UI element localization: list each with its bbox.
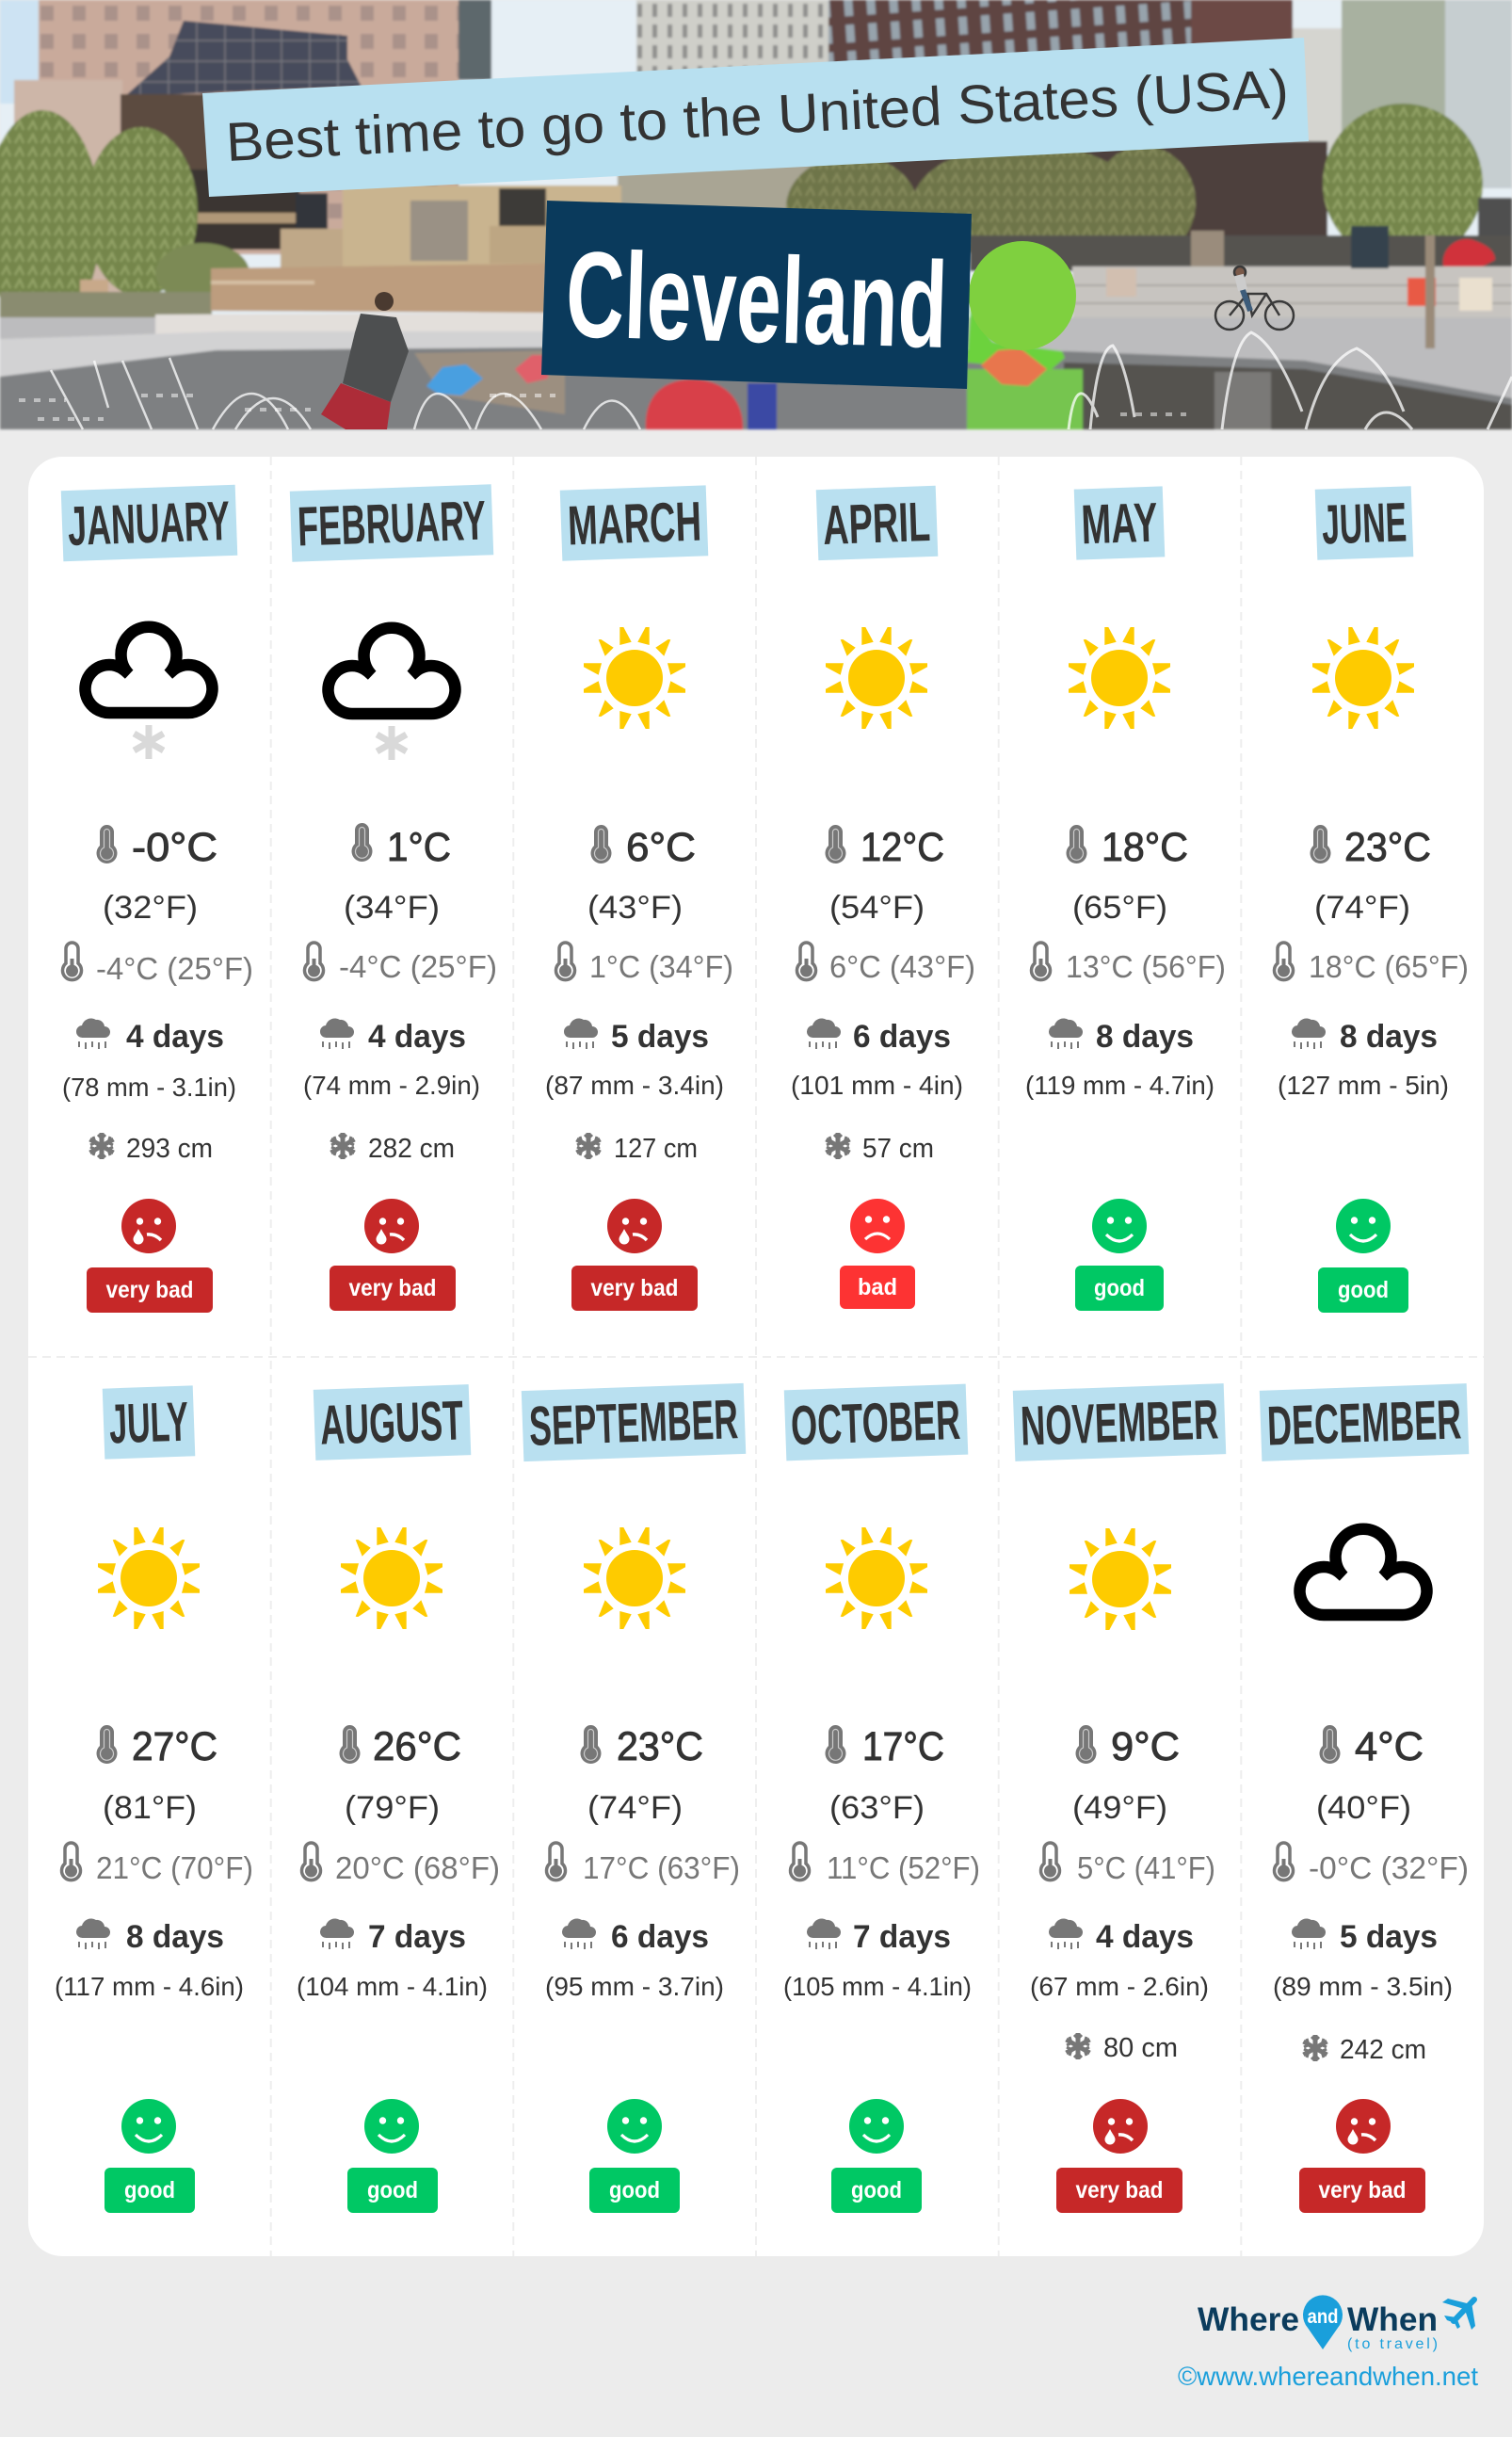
rating face [850, 1199, 905, 1253]
icon: sun [584, 1527, 685, 1629]
logo: Where and When: Where [1198, 2301, 1299, 2338]
rainy days: 8 days [126, 1919, 224, 1955]
rainfall: (78 mm - 3.1in) [62, 1073, 236, 1102]
icon: cloud with snow [85, 627, 213, 759]
rainfall: (89 mm - 3.5in) [1273, 1972, 1453, 2001]
rainy days [320, 1018, 466, 1055]
icon: sun [826, 627, 927, 729]
rating badge: very bad [1075, 2177, 1164, 2203]
snowfall [576, 1133, 698, 1164]
logo: Where and When: When [1347, 2301, 1438, 2338]
temperature in Fahrenheit: (40°F) [1316, 1790, 1411, 1826]
low temperature [1275, 1843, 1469, 1885]
rating face [121, 1199, 176, 1253]
rainy days: 6 days [611, 1919, 709, 1955]
average temperature: 23°C [617, 1724, 703, 1769]
average temperature [1320, 1724, 1424, 1769]
month heading: MARCH [567, 491, 702, 557]
low temperature: 6°C (43°F) [829, 949, 975, 984]
rating badge [1318, 1267, 1408, 1313]
snowfall [827, 1133, 934, 1164]
low temperature [301, 1843, 500, 1885]
icon: sun [98, 1527, 200, 1629]
month heading: OCTOBER [790, 1389, 961, 1457]
rainfall: (67 mm - 2.6in) [1030, 1972, 1209, 2001]
rating badge [831, 2168, 922, 2213]
low temperature: 1°C (34°F) [589, 949, 733, 984]
rating face [849, 2099, 904, 2154]
month heading: JULY [108, 1391, 189, 1455]
rating face [607, 2099, 662, 2154]
low temperature [1275, 943, 1469, 984]
temperature in Fahrenheit: (32°F) [103, 890, 198, 926]
rating badge: very bad [348, 1275, 437, 1301]
rating face [1092, 1199, 1147, 1253]
average temperature: 4°C [1355, 1724, 1424, 1769]
snowfall: 293 cm [126, 1134, 213, 1164]
average temperature [1066, 825, 1188, 870]
rainfall: (105 mm - 4.1in) [783, 1972, 972, 2001]
rating badge: good [851, 2177, 902, 2203]
average temperature: 26°C [373, 1724, 461, 1769]
rating badge [105, 2168, 195, 2213]
average temperature [825, 825, 944, 870]
rainy days [564, 1018, 709, 1055]
rating badge [1299, 2168, 1425, 2213]
rating face [1336, 2099, 1391, 2154]
month heading: SEPTEMBER [528, 1388, 739, 1458]
panel: February [290, 484, 497, 1311]
rainy days [1292, 1918, 1438, 1955]
rating face [364, 1199, 419, 1253]
average temperature: -0°C [132, 825, 217, 870]
icon: map pin: and [1307, 2306, 1339, 2328]
month heading [522, 1383, 746, 1461]
average temperature: 6°C [626, 825, 696, 870]
low temperature: 17°C (63°F) [583, 1850, 740, 1885]
rainy days [807, 1918, 951, 1955]
rating badge [1075, 1266, 1164, 1311]
panel: April [791, 486, 975, 1309]
temperature in Fahrenheit: (74°F) [587, 1790, 683, 1826]
rainfall: (74 mm - 2.9in) [303, 1071, 480, 1100]
icon: sun [584, 627, 685, 729]
low temperature [305, 943, 497, 984]
average temperature [352, 823, 451, 870]
rainy days: 8 days [1340, 1019, 1438, 1055]
snowfall: 242 cm [1340, 2035, 1426, 2065]
title text: Best time to go to the United States (USA) [224, 58, 1290, 173]
low temperature [791, 1843, 980, 1885]
website credit: ©www.whereandwhen.net [1178, 2362, 1478, 2391]
icon: airplane [1442, 2299, 1475, 2330]
average temperature [96, 1724, 217, 1769]
rainy days [1049, 1018, 1194, 1055]
low temperature: 20°C (68°F) [335, 1850, 500, 1885]
average temperature [580, 1724, 703, 1769]
rainfall: (104 mm - 4.1in) [297, 1972, 488, 2001]
snowfall: 127 cm [614, 1134, 698, 1164]
snowfall: 282 cm [368, 1134, 455, 1164]
low temperature: 5°C (41°F) [1077, 1850, 1215, 1885]
low temperature: -0°C (32°F) [1309, 1850, 1469, 1885]
rating face [1093, 2099, 1148, 2154]
icon: sun [1069, 627, 1170, 729]
temperature in Fahrenheit: (63°F) [829, 1790, 925, 1826]
rainy days [76, 1918, 224, 1955]
month heading: JANUARY [67, 490, 231, 557]
rating badge [87, 1267, 213, 1313]
logo: Where and When [1198, 2295, 1475, 2352]
icon: sun [1312, 627, 1414, 729]
header photo: Cleveland plaza with fountain [0, 0, 1512, 429]
panel: monthly card [28, 457, 1484, 2256]
rainfall: (87 mm - 3.4in) [545, 1071, 724, 1100]
temperature in Fahrenheit: (43°F) [587, 890, 683, 926]
low temperature: -4°C (25°F) [96, 951, 253, 986]
month heading [1315, 486, 1413, 560]
temperature in Fahrenheit: (34°F) [344, 890, 440, 926]
month heading: MAY [1080, 492, 1159, 556]
snowfall [1066, 2033, 1178, 2063]
icon: map pin [1303, 2295, 1343, 2349]
low temperature: 18°C (65°F) [1309, 949, 1469, 984]
rainy days [562, 1918, 709, 1955]
figure: cyclist [1215, 266, 1294, 330]
rainy days: 5 days [611, 1019, 709, 1055]
average temperature [1311, 825, 1431, 870]
temperature in Fahrenheit: (54°F) [829, 890, 925, 926]
rainy days: 4 days [368, 1019, 466, 1055]
rating badge [571, 1266, 698, 1311]
average temperature: 27°C [132, 1724, 217, 1769]
panel: November [1013, 1383, 1226, 2213]
low temperature [555, 943, 733, 984]
rainfall: (119 mm - 4.7in) [1025, 1071, 1214, 1100]
rainy days [320, 1918, 466, 1955]
average temperature: 17°C [862, 1724, 944, 1769]
fountain water jets [19, 332, 1512, 429]
rating face [607, 1199, 662, 1253]
panel: October [783, 1384, 980, 2213]
rainfall: (127 mm - 5in) [1278, 1071, 1449, 1100]
rating badge [589, 2168, 680, 2213]
average temperature [825, 1724, 944, 1769]
icon: sun [826, 1527, 927, 1629]
rating badge: good [367, 2177, 418, 2203]
average temperature [591, 825, 696, 870]
panel: July [55, 1385, 253, 2213]
low temperature: 21°C (70°F) [96, 1850, 253, 1885]
snowfall: 80 cm [1103, 2033, 1178, 2063]
panel: August [297, 1384, 500, 2213]
month heading: NOVEMBER [1020, 1388, 1219, 1458]
rainy days: 7 days [368, 1919, 466, 1955]
rainy days: 6 days [853, 1019, 951, 1055]
city name banner [541, 201, 972, 389]
snowfall: 57 cm [862, 1134, 934, 1164]
low temperature [62, 943, 253, 986]
rating badge: good [1094, 1275, 1145, 1301]
icon: cloud [1299, 1529, 1427, 1615]
snowfall [331, 1133, 455, 1164]
rating face [1336, 1199, 1391, 1253]
month heading [560, 485, 708, 561]
rainfall: (95 mm - 3.7in) [545, 1972, 724, 2001]
panel: December [1260, 1383, 1469, 2213]
month heading [290, 484, 493, 562]
panel: March [545, 485, 733, 1311]
month heading: JUNE [1321, 491, 1407, 557]
rating badge [1056, 2168, 1182, 2213]
month heading: AUGUST [319, 1389, 464, 1457]
temperature in Fahrenheit: (74°F) [1314, 890, 1410, 926]
rainy days: 7 days [853, 1919, 951, 1955]
low temperature [546, 1843, 740, 1885]
rating badge: bad [858, 1274, 897, 1300]
icon: sun [341, 1527, 442, 1629]
rating badge: very bad [1318, 2177, 1407, 2203]
average temperature: 9°C [1111, 1724, 1180, 1769]
title banner [202, 38, 1309, 197]
temperature in Fahrenheit: (81°F) [103, 1790, 197, 1826]
temperature in Fahrenheit: (65°F) [1072, 890, 1167, 926]
snowfall [90, 1133, 213, 1164]
temperature in Fahrenheit: (79°F) [345, 1790, 440, 1826]
month heading [1074, 486, 1165, 560]
green snail sculpture [969, 241, 1076, 350]
icon: cloud with snow [328, 628, 456, 760]
rating badge [840, 1266, 915, 1309]
rainy days [76, 1018, 224, 1055]
average temperature [96, 825, 217, 870]
rating badge [347, 2168, 438, 2213]
rating face [364, 2099, 419, 2154]
low temperature: 11°C (52°F) [827, 1850, 980, 1885]
rainfall: (117 mm - 4.6in) [55, 1972, 244, 2001]
rainy days [1292, 1018, 1438, 1055]
rating badge: good [1338, 1277, 1389, 1303]
rating badge: good [609, 2177, 660, 2203]
rating face [121, 2099, 176, 2154]
low temperature [1032, 943, 1226, 984]
panel: January [61, 485, 253, 1313]
average temperature: 12°C [861, 825, 944, 870]
rainy days: 4 days [126, 1019, 224, 1055]
low temperature: -4°C (25°F) [339, 949, 497, 984]
average temperature: 23°C [1344, 825, 1431, 870]
month heading [61, 485, 237, 561]
average temperature: 1°C [387, 825, 451, 870]
rainy days [1049, 1918, 1194, 1955]
rainy days: 4 days [1096, 1919, 1194, 1955]
month heading [314, 1384, 471, 1461]
month heading: APRIL [822, 491, 931, 557]
low temperature [796, 943, 975, 984]
low temperature: 13°C (56°F) [1066, 949, 1226, 984]
rating badge: very bad [105, 1277, 194, 1303]
rainfall: (101 mm - 4in) [791, 1071, 963, 1100]
rating badge: good [124, 2177, 175, 2203]
figure: person in the fountain [321, 292, 409, 429]
month heading [1013, 1383, 1226, 1461]
panel: May [1025, 486, 1226, 1311]
rainy days [807, 1018, 951, 1055]
rainy days: 5 days [1340, 1919, 1438, 1955]
rating badge: very bad [591, 1275, 678, 1301]
panel: June [1275, 486, 1469, 1313]
month heading: FEBRUARY [297, 490, 487, 557]
average temperature: 18°C [1102, 825, 1188, 870]
panel: September [522, 1383, 746, 2213]
temperature in Fahrenheit: (49°F) [1072, 1790, 1167, 1826]
average temperature [1075, 1724, 1180, 1769]
low temperature [1041, 1843, 1215, 1885]
month heading [103, 1385, 195, 1460]
snowfall [1303, 2035, 1426, 2065]
low temperature [62, 1843, 253, 1885]
month heading [784, 1384, 968, 1461]
month heading [816, 486, 938, 560]
city name: Cleveland [564, 225, 949, 374]
logo: Where and When: (to travel) [1347, 2336, 1438, 2352]
rainy days: 8 days [1096, 1019, 1194, 1055]
icon: sun [1070, 1528, 1171, 1630]
rating badge [330, 1266, 456, 1311]
